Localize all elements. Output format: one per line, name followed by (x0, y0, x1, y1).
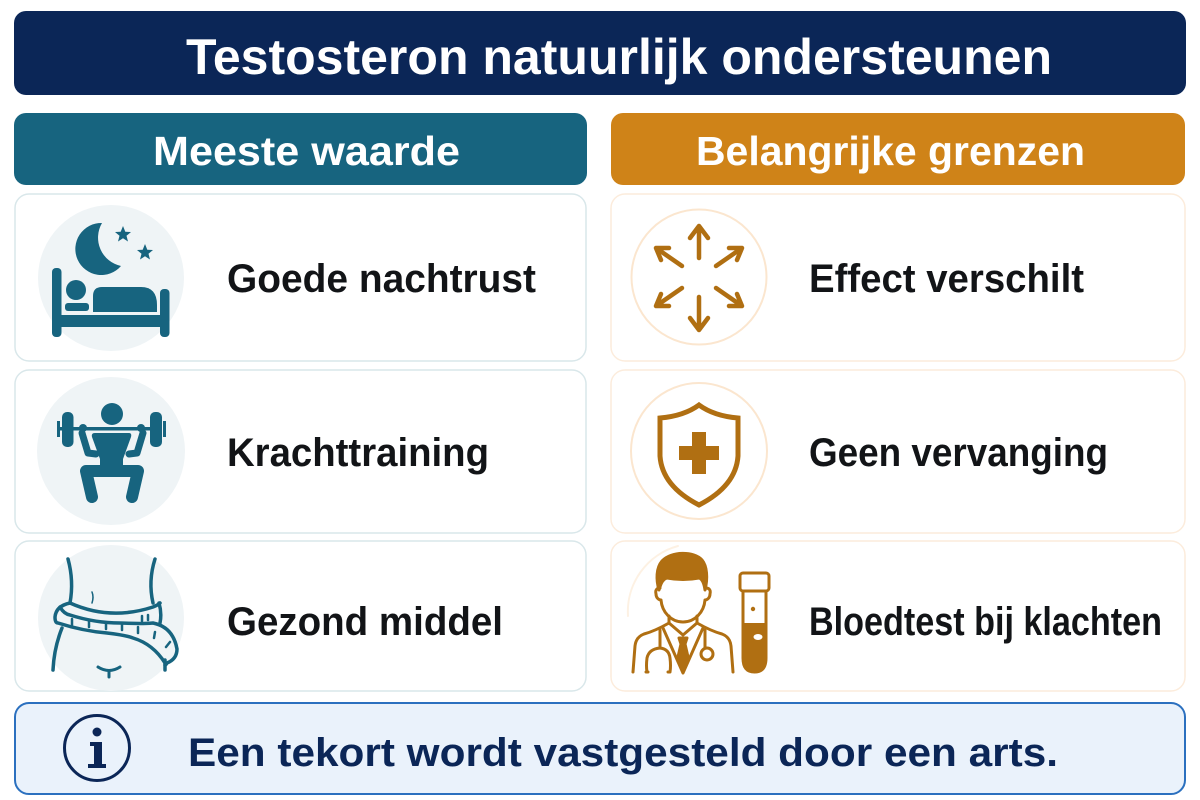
card: effect verschilt (611, 194, 1185, 361)
callout: arts (15, 703, 1185, 794)
icon: weightlifter (37, 377, 185, 525)
panel: belangrijke grenzen (611, 113, 1185, 691)
label: goede nachtrust: Goede nachtrust (227, 257, 536, 301)
label: gezond middel: Gezond middel (227, 600, 503, 644)
label: geen vervanging: Geen vervanging (809, 431, 1108, 475)
icon: bed with moon and stars (38, 205, 184, 351)
panel: meeste waarde (14, 113, 587, 691)
label: effect verschilt: Effect verschilt (809, 257, 1084, 301)
icon: waist with tape measure (38, 545, 184, 691)
card: goede nachtrust (15, 194, 586, 361)
icon: shield with cross (631, 383, 767, 519)
title banner: Testosteron natuurlijk ondersteunen (186, 29, 1052, 85)
icon: info (64, 716, 130, 780)
heading: belangrijke grenzen: Belangrijke grenzen (696, 128, 1085, 174)
card: gezond middel (15, 541, 586, 691)
card: bloedtest bij klachten (611, 541, 1185, 691)
icon: doctor and test tube (628, 546, 769, 673)
heading: belangrijke grenzen (611, 113, 1185, 185)
heading: meeste waarde: Meeste waarde (153, 128, 460, 174)
card: krachttraining (15, 370, 586, 533)
card: geen vervanging (611, 370, 1185, 533)
title banner (14, 11, 1186, 95)
callout text: Een tekort wordt vastgesteld door een arts. (188, 731, 1058, 775)
icon: diverging arrows (632, 210, 766, 344)
label: krachttraining: Krachttraining (227, 431, 489, 475)
heading: meeste waarde (14, 113, 587, 185)
